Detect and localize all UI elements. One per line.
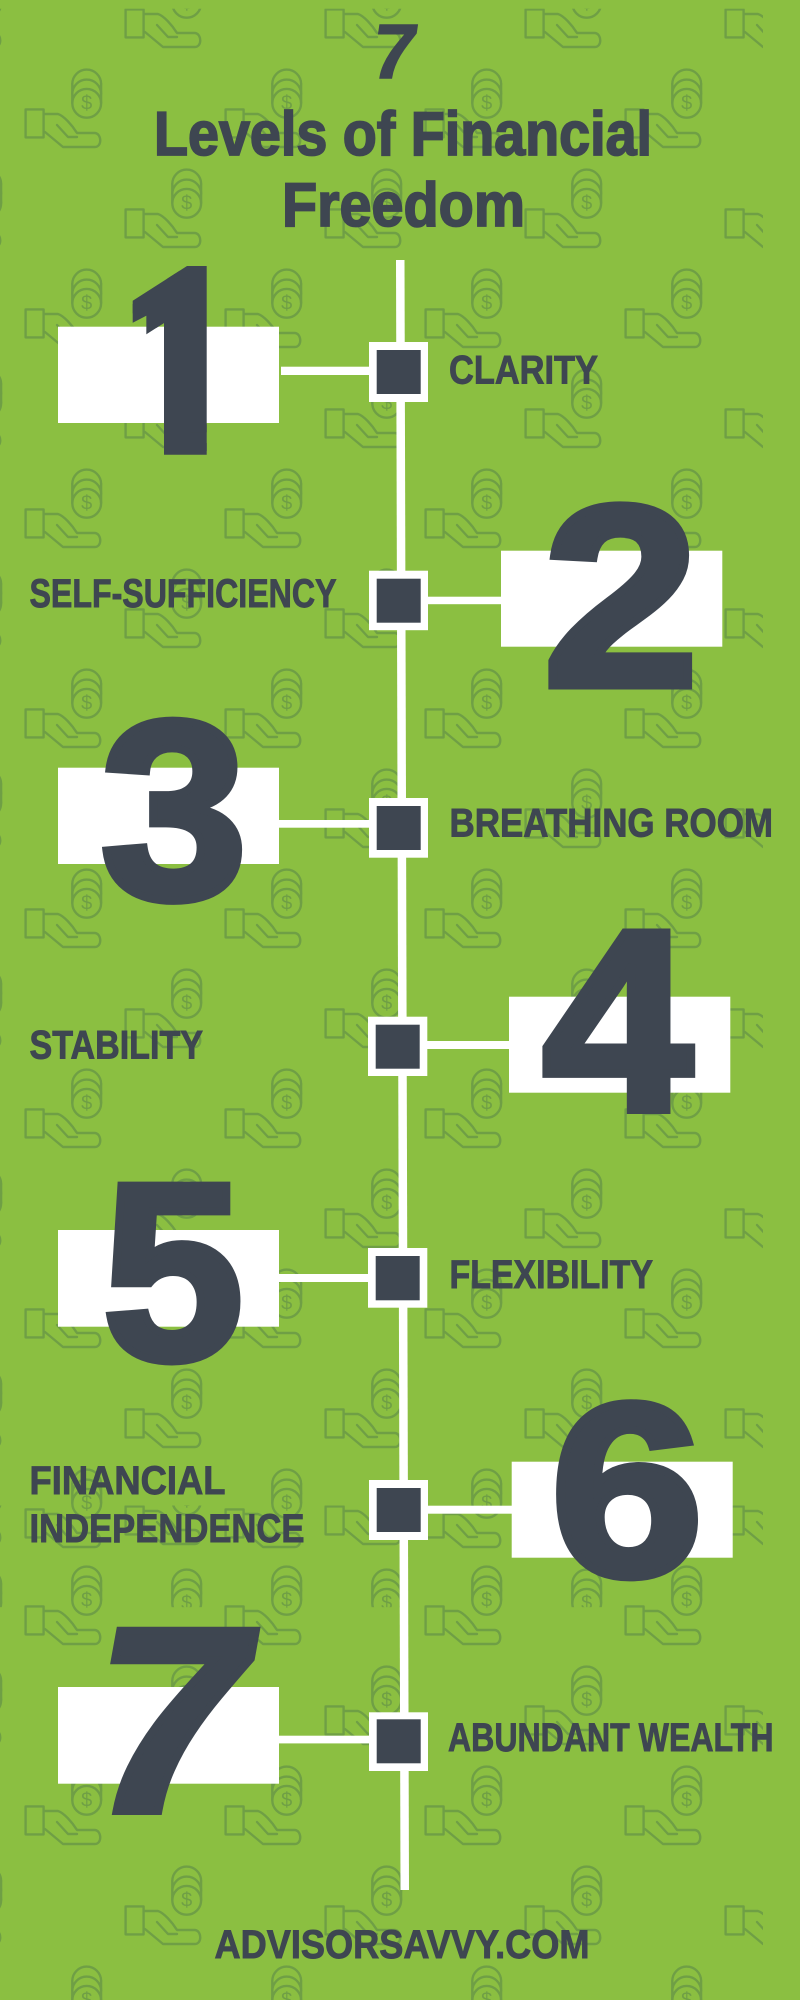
- level 7: [58, 1574, 774, 1867]
- level 3: [58, 668, 773, 952]
- node 5: [368, 1248, 427, 1308]
- title: Freedom: [282, 171, 525, 240]
- number 6: 6: [550, 1353, 704, 1628]
- card 7: [58, 1687, 279, 1784]
- card 5: [58, 1230, 279, 1327]
- connector 4: [426, 1041, 509, 1049]
- label: self-sufficiency: SELF-SUFFICIENCY: [30, 572, 337, 616]
- card 4: [509, 997, 730, 1093]
- label: financial independence: FINANCIAL: [30, 1459, 226, 1503]
- level 6: [30, 1353, 733, 1628]
- timeline vertical line: [396, 260, 409, 1890]
- level 1: [58, 266, 598, 455]
- label: flexibility: FLEXIBILITY: [450, 1253, 653, 1297]
- connector 1: [281, 367, 371, 375]
- node 4: [368, 1017, 427, 1076]
- node 7: [369, 1712, 428, 1771]
- title: [154, 9, 652, 240]
- level 4: [30, 876, 730, 1165]
- footer: website: ADVISORSAVVY.COM: [214, 1923, 590, 1967]
- number 7: 7: [66, 1574, 278, 1867]
- connector 6: [426, 1506, 513, 1514]
- connector 2: [426, 597, 502, 604]
- title: 7: [366, 9, 423, 95]
- card 2: [501, 551, 722, 647]
- node 3: [369, 798, 428, 858]
- card 3: [58, 768, 279, 864]
- number 1: 1: [82, 214, 258, 507]
- number 3: 3: [100, 668, 248, 952]
- node 6: [369, 1480, 428, 1540]
- connector 7: [279, 1736, 371, 1743]
- number 2: 2: [543, 452, 699, 740]
- number 5: 5: [102, 1132, 244, 1413]
- level 5: [58, 1132, 653, 1413]
- card 1: [58, 327, 279, 423]
- connector 3: [279, 820, 371, 828]
- connector 5: [279, 1274, 370, 1282]
- title: Levels of Financial: [154, 100, 652, 169]
- node 2: [369, 571, 428, 630]
- label: financial independence: INDEPENDENCE: [30, 1507, 304, 1551]
- label: stability: STABILITY: [30, 1024, 203, 1068]
- card 6: [512, 1462, 733, 1558]
- node 1: [369, 342, 428, 402]
- number 4: 4: [542, 876, 694, 1165]
- level 2: [30, 452, 722, 740]
- label: clarity: CLARITY: [449, 348, 598, 392]
- label: financial independence: [30, 1459, 304, 1551]
